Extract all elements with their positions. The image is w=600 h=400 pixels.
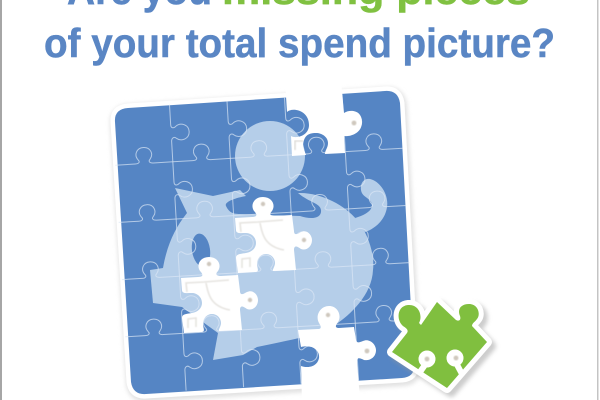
title line 2: of your total spend picture? [44, 20, 555, 66]
green piece shadow [396, 306, 491, 392]
title line 1 [67, 0, 530, 13]
green piece notches [419, 350, 463, 374]
missing piece: bottom gap [298, 306, 376, 400]
green piece body [392, 302, 487, 388]
puzzle board with piggy bank [112, 80, 416, 400]
green puzzle piece [392, 302, 491, 392]
pig eye [192, 234, 210, 265]
pig tail [355, 179, 387, 232]
coin [235, 121, 305, 191]
puzzle seams [112, 91, 416, 394]
missing piece: top gap [285, 80, 362, 156]
missing piece: centre gap [235, 197, 312, 273]
missing piece: left-centre gap [181, 257, 258, 333]
pig body [150, 188, 373, 360]
board shadow [116, 93, 415, 396]
title [44, 0, 555, 66]
piggy bank silhouette [150, 121, 387, 360]
board panel [115, 91, 414, 394]
